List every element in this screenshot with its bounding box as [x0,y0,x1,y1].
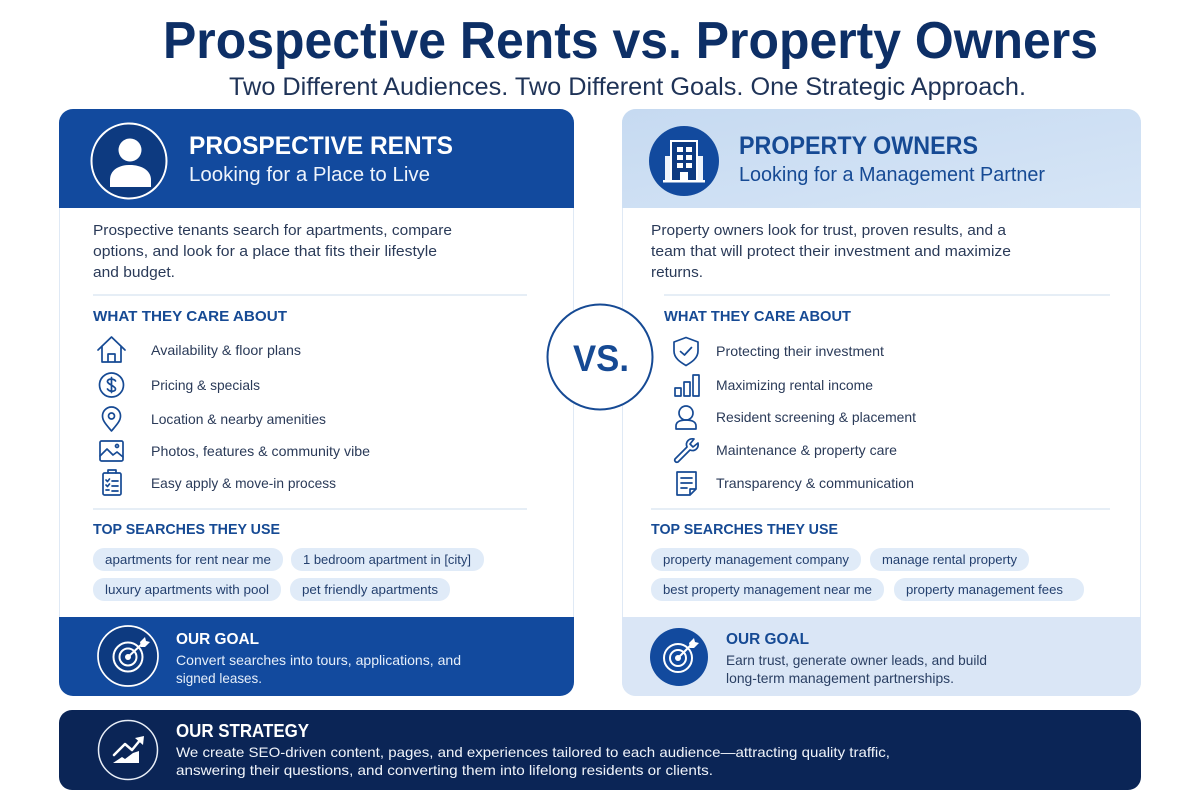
icon: map pin [102,407,120,431]
search pills: property management company [663,552,850,567]
panel: prospective rents [59,109,574,696]
header band: prospective rents [59,109,574,208]
item: location: Location & nearby amenities [151,411,326,427]
icon: target [650,628,708,686]
goal band: prospective rents [59,617,574,696]
description: team that will protect their investment and maximize [651,243,1011,260]
icon: clipboard [103,470,121,495]
icon: target [98,626,158,686]
item: pricing: Pricing & specials [151,377,260,393]
goal heading: OUR GOAL [726,631,809,648]
header subtitle: Looking for a Place to Live [189,164,430,186]
description: and budget. [93,264,175,281]
icon: person outline [676,406,696,429]
goal text: signed leases. [176,670,262,686]
goal text: long-term management partnerships. [726,670,954,686]
header title: PROPERTY OWNERS [739,132,978,160]
heading: what they care about: WHAT THEY CARE ABOUT [664,308,851,325]
icon: growth chart [98,720,158,780]
goal text: Earn trust, generate owner leads, and build [726,652,987,668]
strategy text: We create SEO-driven content, pages, and experiences tailored to each audience—attracting quality traffic, [176,744,890,760]
icon: house [98,337,125,362]
icon: person [92,124,166,198]
search pills: luxury apartments with pool [105,582,269,597]
search pills [651,548,1084,601]
header title: PROSPECTIVE RENTS [189,132,453,160]
header band: property owners [622,109,1141,208]
item: transparency: Transparency & communication [716,475,914,491]
item: easy apply: Easy apply & move-in process [151,475,336,491]
header subtitle: Looking for a Management Partner [739,164,1045,186]
item: photos: Photos, features & community vibe [151,443,370,459]
icon: shield [674,338,698,366]
search pills: pet friendly apartments [302,582,439,597]
icon: dollar [100,373,124,397]
care list [98,337,370,495]
description [93,222,452,281]
vs badge: VS. [573,338,629,379]
description: options, and look for a place that fits their lifestyle [93,243,437,260]
item: screening: Resident screening & placement [716,409,916,425]
goal band: property owners [622,617,1141,696]
title: Prospective Rents vs. Property Owners [163,12,1098,70]
strategy bar [59,710,1141,790]
description: Property owners look for trust, proven results, and a [651,222,1007,239]
icon: document [677,472,696,495]
goal text [726,652,987,686]
item: protecting: Protecting their investment [716,343,884,359]
heading: top searches: TOP SEARCHES THEY USE [651,521,838,538]
item: availability: Availability & floor plans [151,342,301,358]
item: income: Maximizing rental income [716,377,873,393]
goal heading: OUR GOAL [176,631,259,648]
search pills: apartments for rent near me [105,552,271,567]
search pills: best property management near me [663,582,872,597]
strategy heading: OUR STRATEGY [176,721,309,741]
care list [674,338,916,495]
search pills: property management fees [906,582,1063,597]
icon: photo [100,441,123,461]
search pills [93,548,484,601]
strategy text: answering their questions, and converting them into lifelong residents or clients. [176,762,713,778]
search pills: 1 bedroom apartment in [city] [303,552,471,567]
icon: wrench [675,439,698,462]
goal text: Convert searches into tours, applications, and [176,652,461,668]
heading: what they care about: WHAT THEY CARE ABOUT [93,308,287,325]
panel: property owners [622,109,1141,696]
subtitle: Two Different Audiences. Two Different Goals. One Strategic Approach. [229,73,1026,101]
description: returns. [651,264,703,281]
item: maintenance: Maintenance & property care [716,442,897,458]
strategy text [176,744,890,778]
goal text [176,652,461,686]
description [651,222,1011,281]
heading: top searches: TOP SEARCHES THEY USE [93,521,280,538]
vs badge [548,304,652,410]
icon: building [649,126,719,196]
search pills: manage rental property [882,552,1017,567]
icon: bar chart [675,375,699,396]
description: Prospective tenants search for apartments, compare [93,222,452,239]
